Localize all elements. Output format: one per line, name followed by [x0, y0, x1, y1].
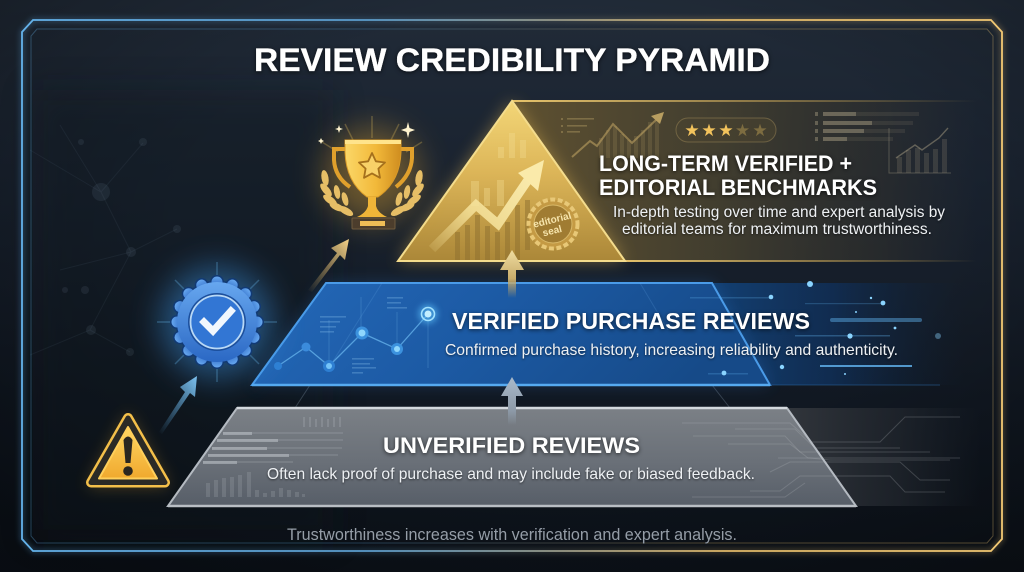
star rating pill: ★: [718, 121, 734, 140]
arrow: to trophy: [308, 239, 349, 292]
tier: unverified reviews: [168, 408, 980, 506]
blue extension band: [700, 283, 965, 385]
star rating pill: ★: [735, 121, 750, 140]
footer note: Trustworthiness increases with verification and expert analysis.: [287, 526, 737, 544]
star rating pill: ★: [752, 121, 768, 140]
gold heading: LONG-TERM VERIFIED +: [599, 151, 852, 176]
faint bar chart: [206, 472, 305, 497]
connector lines between tiers: [295, 385, 730, 408]
gold description: editorial teams for maximum trustworthiness.: [622, 221, 932, 238]
title: REVIEW CREDIBILITY PYRAMID: [254, 42, 770, 78]
data streaks: [690, 281, 941, 375]
faint list bars: [203, 432, 343, 464]
verified description: Confirmed purchase history, increasing reliability and authenticity.: [445, 342, 898, 359]
warning exclamation: [123, 436, 133, 476]
tier: verified purchase reviews: [252, 281, 965, 385]
gold extension band: [512, 100, 977, 262]
trophy sparkles: [318, 122, 415, 144]
trophy cup: [345, 140, 401, 197]
editorial seal: editorial: [532, 210, 573, 231]
band bar list: [815, 112, 919, 141]
diagonal sheen: [330, 283, 668, 366]
trophy handles: [334, 149, 412, 187]
band trend chart: [572, 112, 664, 158]
arrow: to badge: [159, 376, 197, 434]
icon: warning triangle: [87, 413, 170, 487]
arrow: blue tier up to gold tier: [500, 250, 524, 298]
blue glow: [252, 283, 770, 385]
gold description: In-depth testing over time and expert analysis by: [613, 204, 945, 221]
badge scallops: [172, 276, 262, 368]
band small chart: [889, 128, 951, 173]
laurel right: [389, 170, 426, 218]
tier: long-term verified and editorial benchmarks: [398, 100, 977, 262]
arrow: grey tier up to blue tier: [501, 377, 523, 425]
star rating pill: ★: [701, 121, 717, 140]
icon: verified badge: [157, 262, 277, 382]
trophy star: [359, 153, 385, 178]
blue trapezoid panel: [252, 283, 770, 385]
triangle inner bars: [471, 133, 526, 206]
editorial seal: seal: [542, 224, 563, 239]
laurel left: [318, 170, 355, 218]
star rating pill: ★: [684, 121, 700, 140]
trophy stem and base: [357, 197, 387, 217]
tick row: [303, 417, 341, 427]
gold triangle glow: [398, 101, 625, 261]
icon: trophy: [318, 116, 426, 229]
circuit traces: [682, 417, 960, 497]
grey trapezoid panel: [168, 408, 856, 506]
gold pyramid triangle: [398, 101, 625, 261]
editorial seal: [528, 200, 578, 248]
line chart: [274, 297, 438, 374]
badge check mark: [204, 311, 231, 331]
star rating pill: [676, 118, 776, 142]
verified heading: VERIFIED PURCHASE REVIEWS: [452, 308, 810, 334]
unverified heading: UNVERIFIED REVIEWS: [383, 433, 640, 458]
badge inner ring: [188, 293, 246, 351]
band mini list: [561, 118, 594, 133]
gold heading: EDITORIAL BENCHMARKS: [599, 175, 877, 200]
unverified description: Often lack proof of purchase and may include fake or biased feedback.: [267, 466, 755, 483]
grey extension band: [780, 408, 980, 506]
triangle trend arrow: [432, 160, 544, 249]
